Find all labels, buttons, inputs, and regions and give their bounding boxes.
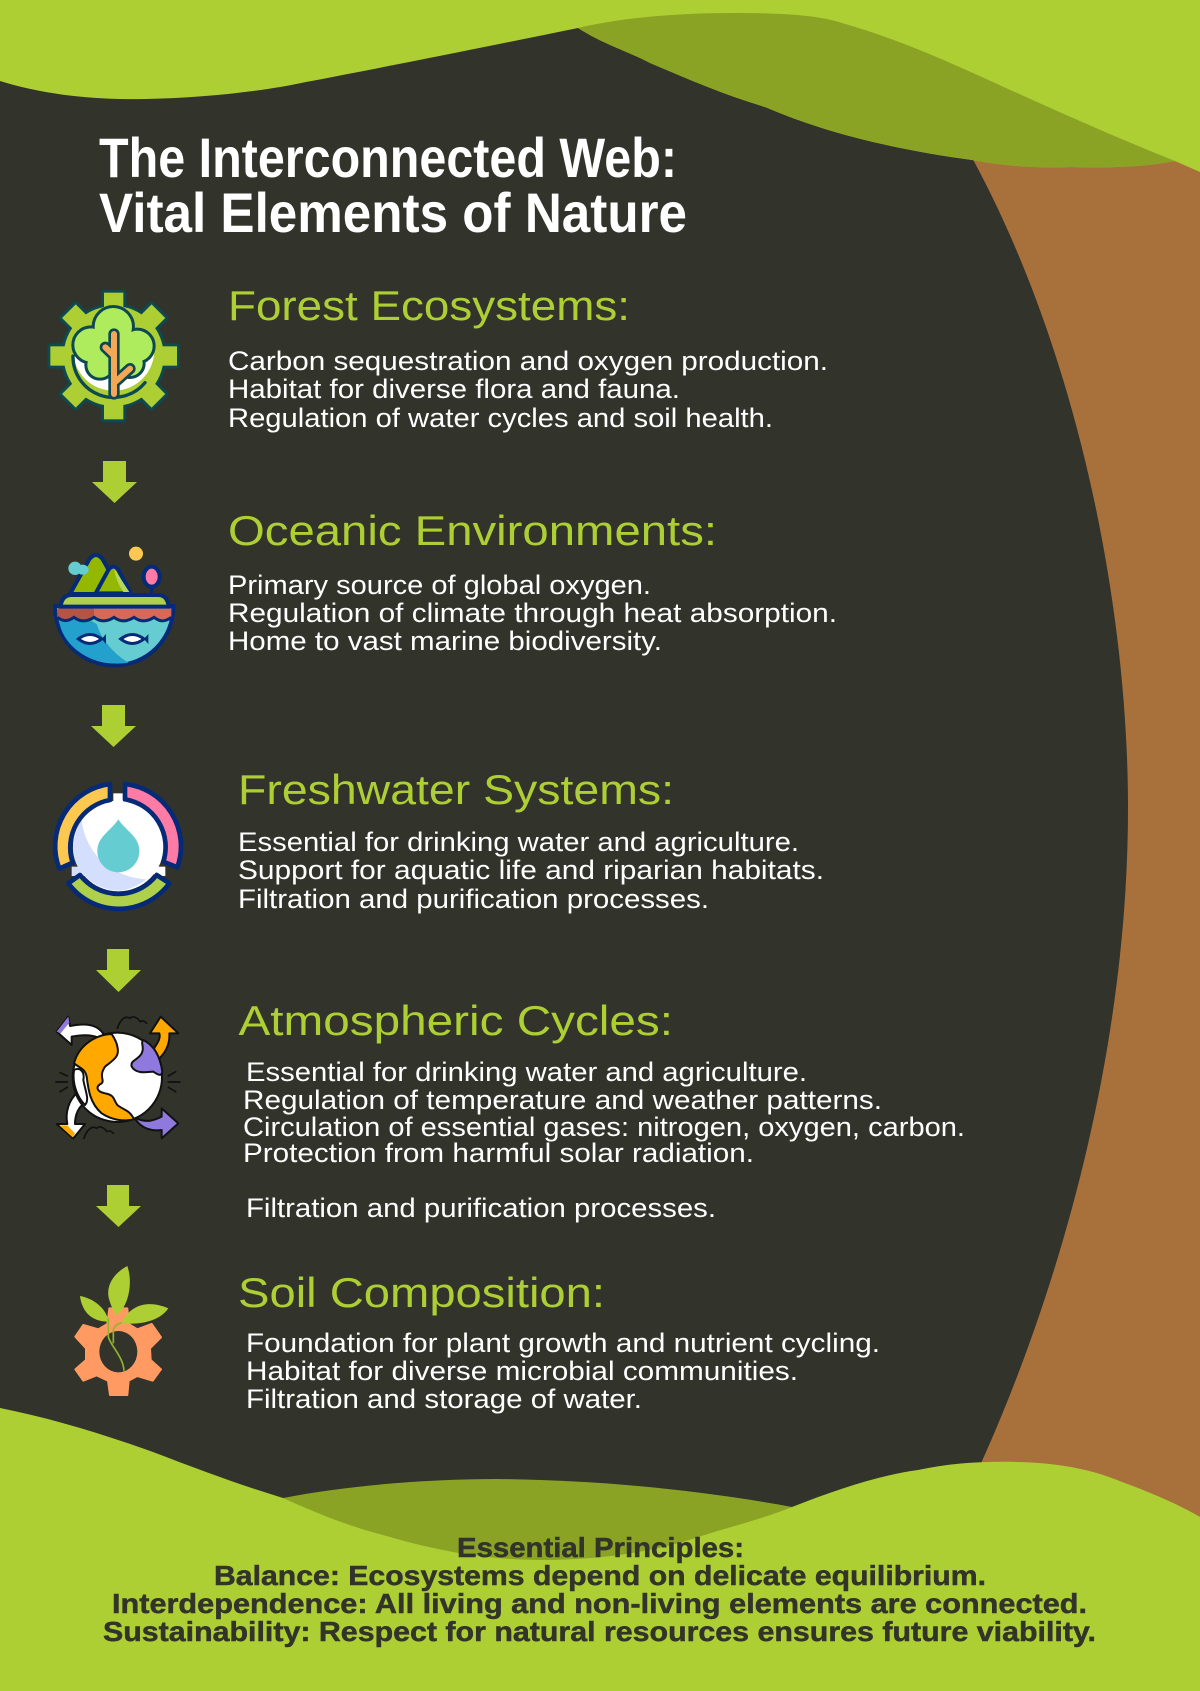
- icon: freshwater droplet ring: [55, 784, 181, 909]
- panel: soil composition: [238, 1269, 880, 1414]
- top wave: olive layer: [578, 13, 1175, 167]
- panel: soil composition: Filtration and storage of water.: [246, 1384, 642, 1414]
- panel: forest ecosystems: [228, 282, 828, 433]
- panel: freshwater systems: Essential for drinking water and agriculture.: [238, 827, 799, 857]
- panel: freshwater systems: Filtration and purification processes.: [238, 884, 709, 914]
- panel: oceanic environments: [228, 507, 837, 656]
- title: [99, 126, 687, 244]
- panel: soil composition: Soil Composition:: [238, 1269, 605, 1316]
- icon: ocean island bowl: [55, 547, 173, 665]
- panel: soil composition: Habitat for diverse microbial communities.: [246, 1356, 798, 1386]
- title: Vital Elements of Nature: [99, 181, 687, 244]
- arrow: atmosphere to soil: [96, 1185, 141, 1227]
- panel: forest ecosystems: Forest Ecosystems:: [228, 282, 630, 329]
- panel: atmospheric cycles: Essential for drinking water and agriculture.: [246, 1057, 807, 1087]
- panel: atmospheric cycles: Protection from harmful solar radiation.: [243, 1138, 754, 1168]
- panel: soil composition: Foundation for plant growth and nutrient cycling.: [246, 1328, 880, 1358]
- icon: soil gear with sprout: [75, 1266, 168, 1395]
- panel: freshwater systems: Support for aquatic life and riparian habitats.: [238, 855, 824, 885]
- arrow: ocean to freshwater: [91, 705, 136, 747]
- title: The Interconnected Web:: [99, 126, 677, 189]
- callout: essential principles: [103, 1532, 1096, 1647]
- top wave: light green layer: [0, 0, 1200, 172]
- panel: atmospheric cycles: Circulation of essential gases: nitrogen, oxygen, carbon.: [243, 1112, 965, 1142]
- bottom wave: olive layer: [283, 1479, 792, 1580]
- panel: atmospheric cycles: Regulation of temperature and weather patterns.: [243, 1085, 882, 1115]
- panel: oceanic environments: Home to vast marine biodiversity.: [228, 626, 662, 656]
- icon: atmospheric globe with arrows: [56, 1017, 180, 1138]
- panel: atmospheric cycles: Atmospheric Cycles:: [238, 997, 673, 1044]
- arrow: freshwater to atmosphere: [96, 949, 141, 992]
- callout: essential principles: Balance: Ecosystems depend on delicate equilibrium.: [214, 1560, 986, 1591]
- callout: essential principles: Interdependence: All living and non-living elements are connected.: [112, 1588, 1087, 1619]
- callout: essential principles: Essential Principles:: [457, 1532, 744, 1563]
- panel: forest ecosystems: Carbon sequestration and oxygen production.: [228, 346, 828, 376]
- panel: oceanic environments: Regulation of climate through heat absorption.: [228, 598, 837, 628]
- panel: forest ecosystems: Habitat for diverse flora and fauna.: [228, 374, 680, 404]
- panel: freshwater systems: [238, 766, 824, 914]
- icon: forest tree gear: [50, 293, 177, 419]
- panel: atmospheric cycles: Filtration and purification processes.: [246, 1193, 716, 1223]
- background: brown tree trunk shape: [965, 140, 1200, 1530]
- panel: forest ecosystems: Regulation of water cycles and soil health.: [228, 403, 773, 433]
- panel: oceanic environments: Primary source of global oxygen.: [228, 570, 651, 600]
- panel: freshwater systems: Freshwater Systems:: [238, 766, 674, 813]
- panel: atmospheric cycles: [238, 997, 965, 1223]
- panel: oceanic environments: Oceanic Environments:: [228, 507, 717, 554]
- callout: essential principles: Sustainability: Respect for natural resources ensures future viability.: [103, 1616, 1096, 1647]
- bottom wave: light green layer: [0, 1408, 1200, 1691]
- arrow: forest to ocean: [92, 461, 137, 503]
